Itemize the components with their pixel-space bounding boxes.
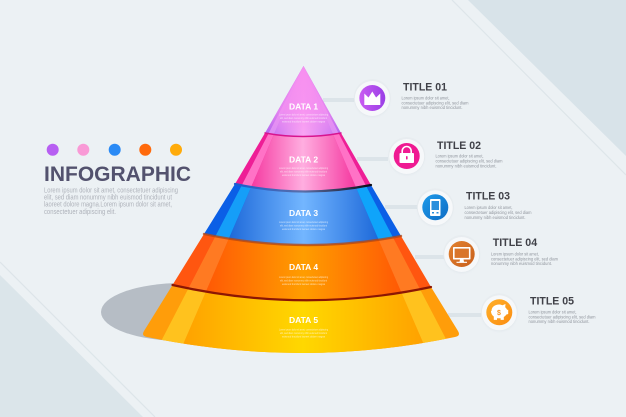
label: data 5: elit, sed diam nonummy nibh euismod tincidunt: [280, 331, 327, 335]
title block 02: [436, 140, 503, 168]
label: data 2: Lorem ipsum dolor sit amet, consectetuer adipiscing: [279, 166, 328, 170]
label: data 4: euismod tincidunt laoreet dolore magna: [282, 282, 325, 286]
heading: INFOGRAPHIC: [44, 163, 191, 186]
title block 01: nonummy nibh euismod tincidunt.: [402, 105, 462, 110]
icon: crown: [354, 79, 391, 116]
connector bars: [323, 98, 481, 317]
title block 03: [464, 191, 532, 220]
title block 04: [491, 237, 558, 266]
layer 2: [236, 134, 370, 190]
title block 04: nonummy nibh euismod tincidunt.: [491, 261, 552, 266]
label: data 5: Lorem ipsum dolor sit amet, consectetuer adipiscing: [279, 328, 328, 332]
layer 3: [204, 185, 401, 245]
top right corner panel: [468, 0, 626, 156]
label: data 4: DATA 4: [289, 262, 318, 272]
title block 03: TITLE 03: [466, 191, 510, 203]
label: data 1: elit, sed diam nonummy nibh euismod tincidunt: [280, 116, 327, 120]
intro paragraph: consectetuer adipiscing elit.: [44, 209, 116, 216]
label: data 3: Lorem ipsum dolor sit amet, consectetuer adipiscing: [279, 220, 328, 224]
title block 04: Lorem ipsum dolor sit amet,: [491, 251, 539, 256]
label: data 4: Lorem ipsum dolor sit amet, consectetuer adipiscing: [279, 275, 328, 279]
title block 02: Lorem ipsum dolor sit amet,: [436, 154, 484, 159]
title block 04: consectetuer adipiscing elit, sed diam: [491, 256, 558, 261]
intro paragraph: [44, 188, 178, 216]
title block 05: TITLE 05: [530, 295, 574, 307]
label: data 5: DATA 5: [289, 315, 318, 325]
title block 01: Lorem ipsum dolor sit amet,: [402, 95, 450, 100]
layer 1: [265, 66, 341, 136]
bottom left corner panel: [0, 275, 143, 417]
intro paragraph: elit, sed diam nonummy nibh euismod tincidunt ut: [44, 194, 172, 202]
label: data 4: [279, 262, 328, 286]
label: data 2: [279, 155, 328, 177]
title block 03: Lorem ipsum dolor sit amet,: [464, 205, 512, 210]
label: data 1: euismod tincidunt laoreet dolore magna: [282, 120, 325, 124]
title block 02: nonummy nibh euismod tincidunt.: [436, 164, 496, 168]
title block 03: consectetuer adipiscing elit, sed diam: [464, 210, 532, 215]
intro paragraph: laoreet dolore magna.Lorem ipsum dolor sit amet,: [44, 202, 172, 209]
label: data 3: euismod tincidunt laoreet dolore magna: [282, 227, 325, 231]
icon: phone: [417, 188, 454, 225]
label: data 2: elit, sed diam nonummy nibh euismod tincidunt: [280, 170, 327, 174]
pyramid: [143, 66, 459, 353]
label: data 5: euismod tincidunt laoreet dolore magna: [282, 334, 325, 338]
icon: padlock: [388, 137, 425, 174]
title block 01: TITLE 01: [403, 82, 447, 94]
title block 05: nonummy nibh euismod tincidunt.: [528, 319, 590, 324]
title block 04: TITLE 04: [493, 237, 538, 249]
label: data 2: DATA 2: [289, 155, 318, 165]
intro paragraph: Lorem ipsum dolor sit amet, consectetuer adipiscing: [44, 188, 178, 194]
label: data 5: [279, 315, 328, 338]
title block 01: [402, 82, 469, 110]
layer 4: [173, 234, 430, 300]
title block 02: consectetuer adipiscing elit, sed diam: [436, 159, 503, 164]
label: data 3: DATA 3: [289, 208, 318, 218]
layer rims: [172, 133, 431, 300]
label: data 1: [279, 101, 328, 124]
icon: monitor: [443, 235, 480, 272]
icon: piggy bank: [481, 293, 518, 330]
title block 05: [528, 295, 596, 324]
label: data 3: elit, sed diam nonummy nibh euismod tincidunt: [280, 224, 327, 228]
label: data 1: Lorem ipsum dolor sit amet, consectetuer adipiscing: [279, 112, 328, 116]
label: data 4: elit, sed diam nonummy nibh euismod tincidunt: [280, 278, 327, 282]
icon: piggy bank: $: [497, 310, 501, 317]
pyramid shadow: [101, 283, 263, 341]
label: data 3: [279, 208, 328, 231]
label: data 1: DATA 1: [289, 101, 318, 111]
title block 05: consectetuer adipiscing elit, sed diam: [528, 314, 596, 319]
layer 5: [143, 286, 459, 353]
title block 02: TITLE 02: [437, 140, 481, 152]
label: data 2: euismod tincidunt laoreet dolore magna: [282, 173, 325, 177]
title block 01: consectetuer adipiscing elit, sed diam: [402, 100, 469, 105]
title block 03: nonummy nibh euismod tincidunt.: [464, 215, 526, 220]
title block 05: Lorem ipsum dolor sit amet,: [528, 309, 576, 314]
color dots: [47, 144, 182, 156]
